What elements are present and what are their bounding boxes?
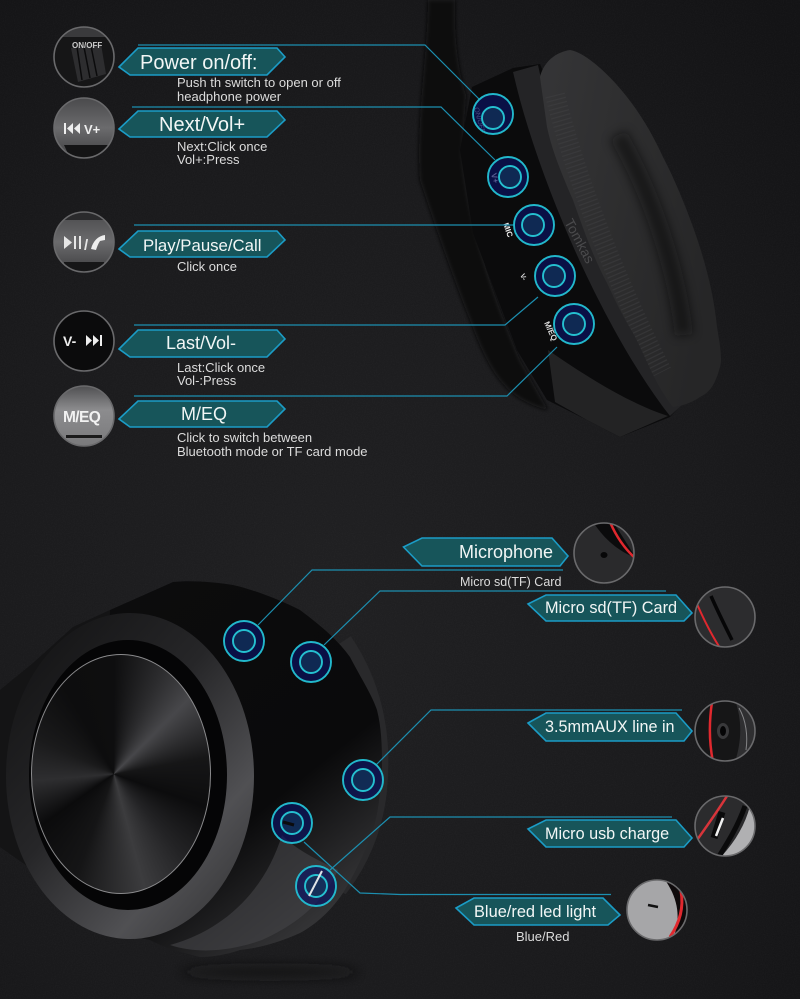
label banner	[528, 713, 692, 741]
button legend: last: V-	[518, 273, 528, 282]
outer cap ring	[6, 613, 254, 939]
callout: blue/red led light	[272, 803, 690, 944]
cushion band	[513, 65, 684, 416]
port ring	[343, 760, 383, 800]
description: Bluetooth mode or TF card mode	[177, 444, 368, 459]
leader line	[134, 224, 515, 226]
label banner	[119, 48, 285, 75]
headphone: front view with ports	[0, 581, 382, 977]
icon rim	[54, 386, 114, 446]
label banner	[528, 595, 692, 621]
description: headphone power	[177, 89, 282, 104]
detail photo: aux jack	[696, 704, 754, 760]
brand mark: Tomkas	[561, 216, 598, 266]
button legend: m/eq: M/EQ	[542, 320, 559, 342]
earcup body	[100, 581, 382, 957]
label banner	[404, 538, 568, 566]
icon: on/off switch	[63, 28, 106, 82]
icon rim	[574, 523, 634, 583]
leader line	[134, 347, 557, 396]
button ring	[473, 94, 513, 134]
leader line	[376, 710, 682, 765]
button ring	[535, 256, 575, 296]
leader line	[324, 591, 666, 645]
description: Blue/Red	[516, 929, 569, 944]
button legend: on/off: ON/OFF	[472, 107, 486, 134]
callout: last / vol-	[54, 256, 575, 388]
leader line	[330, 817, 672, 870]
earcup shell	[460, 64, 683, 437]
callout: power on/off	[54, 27, 513, 134]
icon: m/eq: M/EQ	[63, 409, 101, 426]
detail photo: microphone hole	[575, 524, 634, 582]
description: Push th switch to open or off	[177, 75, 341, 90]
gloss crescent	[170, 835, 338, 950]
icon: next and volume up	[54, 98, 114, 158]
button ring	[488, 157, 528, 197]
leader line	[134, 297, 538, 325]
description: Next:Click once	[177, 139, 267, 154]
callout: play / pause / call	[54, 205, 554, 274]
icon: play pause call	[54, 212, 114, 272]
leader line	[132, 107, 495, 160]
heading: Power on/off:	[140, 52, 257, 74]
label banner	[119, 231, 285, 257]
heading: Microphone	[459, 542, 553, 562]
button ring	[514, 205, 554, 245]
description: Click once	[177, 259, 237, 274]
icon: on/off switch: ON/OFF	[72, 41, 102, 50]
leader line	[138, 45, 480, 100]
icon rim	[695, 587, 755, 647]
icon: volume down and last	[54, 311, 114, 371]
black inner recess	[29, 640, 227, 910]
label banner	[528, 820, 692, 847]
heading: Micro usb charge	[545, 825, 669, 843]
icon rim	[54, 311, 114, 371]
ear cushion	[540, 50, 721, 405]
heading: Play/Pause/Call	[143, 236, 261, 255]
ear cushion edge	[340, 640, 381, 890]
heading: 3.5mmAUX line in	[545, 718, 675, 736]
port ring	[296, 866, 336, 906]
shell lower band	[548, 350, 668, 437]
icon rim	[627, 880, 687, 940]
icon rim	[54, 212, 114, 272]
callout: m/eq	[54, 304, 594, 459]
icon rim	[695, 701, 755, 761]
metal disc	[32, 655, 210, 893]
label banner	[119, 111, 285, 137]
description: Click to switch between	[177, 430, 312, 445]
detail photo: led	[627, 880, 690, 940]
button legend: next: V+	[489, 172, 500, 185]
icon rim	[695, 796, 755, 856]
callout: micro sd card	[291, 587, 755, 682]
led ring	[272, 803, 312, 843]
port ring	[291, 642, 331, 682]
description: Last:Click once	[177, 360, 265, 375]
heading: Blue/red led light	[474, 903, 597, 921]
icon rim	[54, 98, 114, 158]
heading: Micro sd(TF) Card	[545, 599, 677, 617]
icon: volume down and last: V-	[63, 333, 77, 349]
heading: M/EQ	[181, 404, 227, 424]
heading: Last/Vol-	[166, 333, 236, 353]
label banner	[456, 898, 620, 925]
heading: Next/Vol+	[159, 114, 245, 136]
description: Micro sd(TF) Card	[460, 575, 561, 589]
floor shadow	[180, 967, 360, 977]
metal disc rim	[31, 654, 211, 894]
button legend: play: MIC	[501, 222, 515, 239]
icon rim	[54, 27, 114, 87]
headband	[419, 0, 548, 410]
callout: next / vol+	[54, 98, 528, 197]
leader line	[258, 570, 563, 625]
headphone: side view with control buttons	[419, 0, 730, 437]
icon: m/eq	[54, 386, 114, 446]
label banner	[119, 330, 285, 357]
button ring	[554, 304, 594, 344]
label banner	[119, 401, 285, 427]
port ring	[224, 621, 264, 661]
description: Vol+:Press	[177, 152, 240, 167]
detail photo: usb port	[696, 796, 754, 856]
callout: microphone	[224, 520, 636, 661]
detail photo: card slot	[695, 587, 755, 648]
leader line	[304, 842, 611, 894]
description: Vol-:Press	[177, 373, 237, 388]
headband hinge	[0, 610, 130, 930]
icon: play pause call: /	[84, 237, 89, 254]
callout: micro usb charge	[296, 796, 760, 906]
icon: next and volume up: V+	[84, 122, 101, 137]
callout: aux line in	[343, 700, 755, 800]
